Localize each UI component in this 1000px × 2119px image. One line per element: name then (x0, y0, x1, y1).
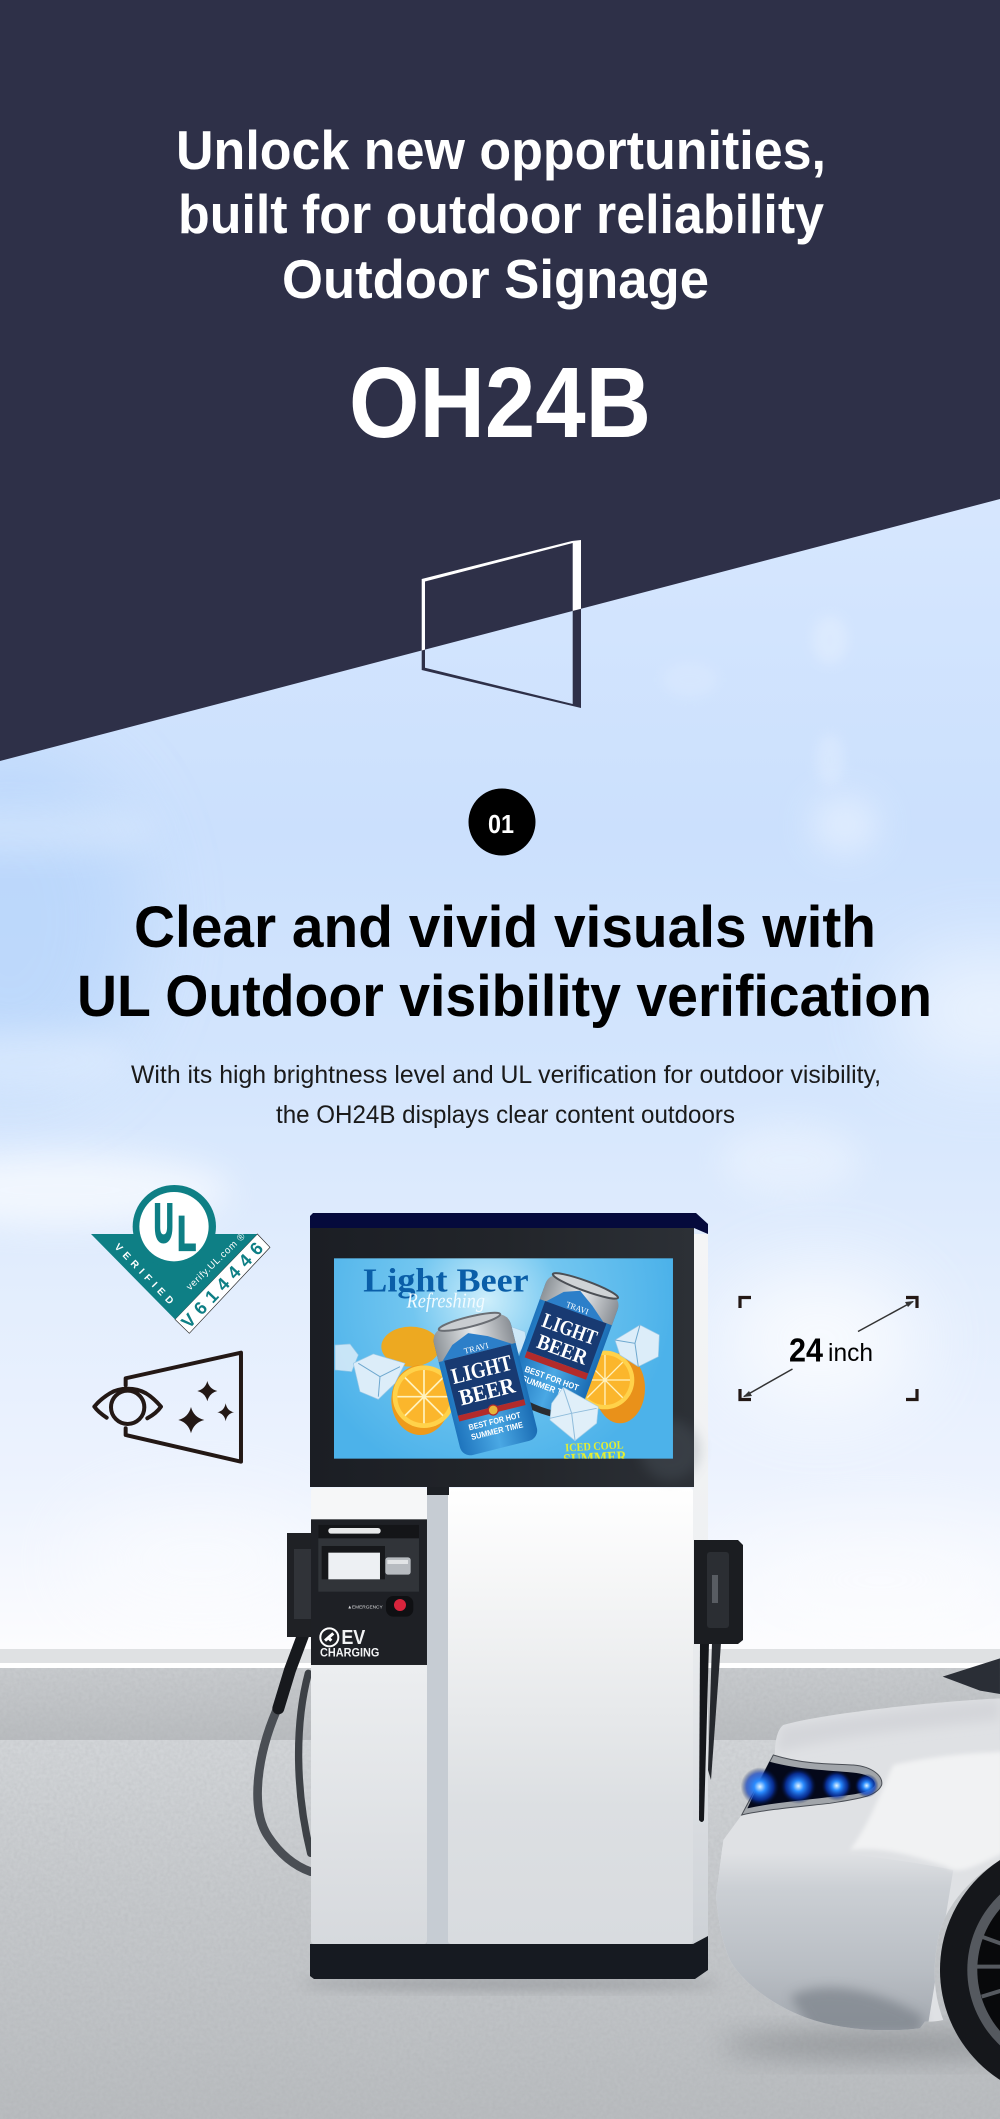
number badge (468, 788, 536, 856)
UL verified badge: U (154, 1195, 173, 1254)
emergency label: ▲EMERGENCY (347, 1605, 383, 1611)
tail lamp (741, 1755, 882, 1815)
icon: 24 inch screen size: 24 (789, 1332, 824, 1368)
body text: With its high brightness level and UL verification for outdoor visibility, (131, 1061, 881, 1089)
head top band (310, 1213, 708, 1234)
car body (713, 1697, 1000, 2033)
head unit (310, 1228, 694, 1487)
EV charging logo: CHARGING (320, 1645, 379, 1659)
charger shadow (300, 1978, 720, 1990)
dark diagonal header panel (0, 0, 1000, 761)
EV charging logo (320, 1627, 379, 1659)
title: Outdoor Signage (282, 248, 709, 310)
cabinet side (693, 1234, 708, 1944)
centre channel (427, 1488, 449, 1948)
sky background (0, 480, 1000, 1650)
can front: BEER (456, 1372, 518, 1410)
can back (519, 1272, 619, 1416)
icon: 24 inch screen size (740, 1298, 917, 1400)
ad tagline: SUMMER (563, 1449, 627, 1469)
EV charging logo: EV (341, 1627, 366, 1649)
can back: BEST FOR HOT (523, 1364, 581, 1393)
body text (131, 1061, 881, 1129)
right orange half (585, 1350, 645, 1424)
icon: outdoor display frame (422, 540, 581, 708)
can front: LIGHT (449, 1350, 514, 1389)
left holster (287, 1533, 313, 1637)
can back: LIGHT (539, 1308, 600, 1350)
ad headline (364, 1268, 528, 1312)
icon: 24 inch screen size: inch (828, 1339, 873, 1367)
charger cabinet (310, 1213, 708, 1979)
charging cables left (258, 1630, 311, 1872)
car (713, 1658, 1000, 2101)
car shadow (720, 2032, 1000, 2058)
can front: BEST FOR HOT (467, 1410, 522, 1432)
emergency button (386, 1596, 413, 1617)
can front: TRAVI (463, 1341, 490, 1356)
UL verified badge (91, 1185, 270, 1333)
ad headline: Light Beer (363, 1263, 529, 1300)
ice cubes (335, 1325, 659, 1399)
base (310, 1936, 708, 1979)
ad headline: Refreshing (406, 1288, 485, 1312)
UL verified badge: L (177, 1207, 196, 1261)
section heading: UL Outdoor visibility verification (77, 964, 932, 1029)
UL verified badge: VERIFIED (112, 1242, 175, 1307)
can back: BEER (534, 1329, 591, 1370)
can back: TRAVI (565, 1300, 590, 1317)
rear window (943, 1658, 1000, 1694)
number badge: 01 (488, 809, 514, 839)
left orange half (391, 1365, 455, 1435)
right holster with cables (694, 1540, 743, 1822)
lemon (381, 1327, 440, 1367)
title: Unlock new opportunities, (176, 119, 826, 181)
title: built for outdoor reliability (178, 183, 824, 245)
ad tagline (564, 1441, 625, 1459)
model name: OH24B (349, 347, 651, 459)
body lower shade (716, 1868, 953, 2030)
display advertisement (334, 1258, 673, 1469)
front ice cube (550, 1387, 598, 1441)
UL verified badge: V614446 (177, 1238, 267, 1332)
section heading (77, 895, 932, 1029)
can front: SUMMER TIME (470, 1419, 524, 1442)
section heading: Clear and vivid visuals with (134, 895, 876, 960)
control panel (311, 1519, 427, 1665)
road and ground (0, 1649, 1000, 2119)
can front (430, 1307, 539, 1458)
body text: the OH24B displays clear content outdoors (276, 1101, 735, 1129)
can back: SUMMER TIME (520, 1373, 577, 1402)
title (176, 119, 826, 310)
icon: eye with sparkles (94, 1353, 241, 1462)
left panel (311, 1488, 427, 1524)
right panel (448, 1488, 693, 1944)
ad tagline: ICED COOL (565, 1439, 624, 1454)
wheel (940, 1839, 1000, 2101)
UL verified badge: verify.UL.com ® (184, 1231, 248, 1293)
